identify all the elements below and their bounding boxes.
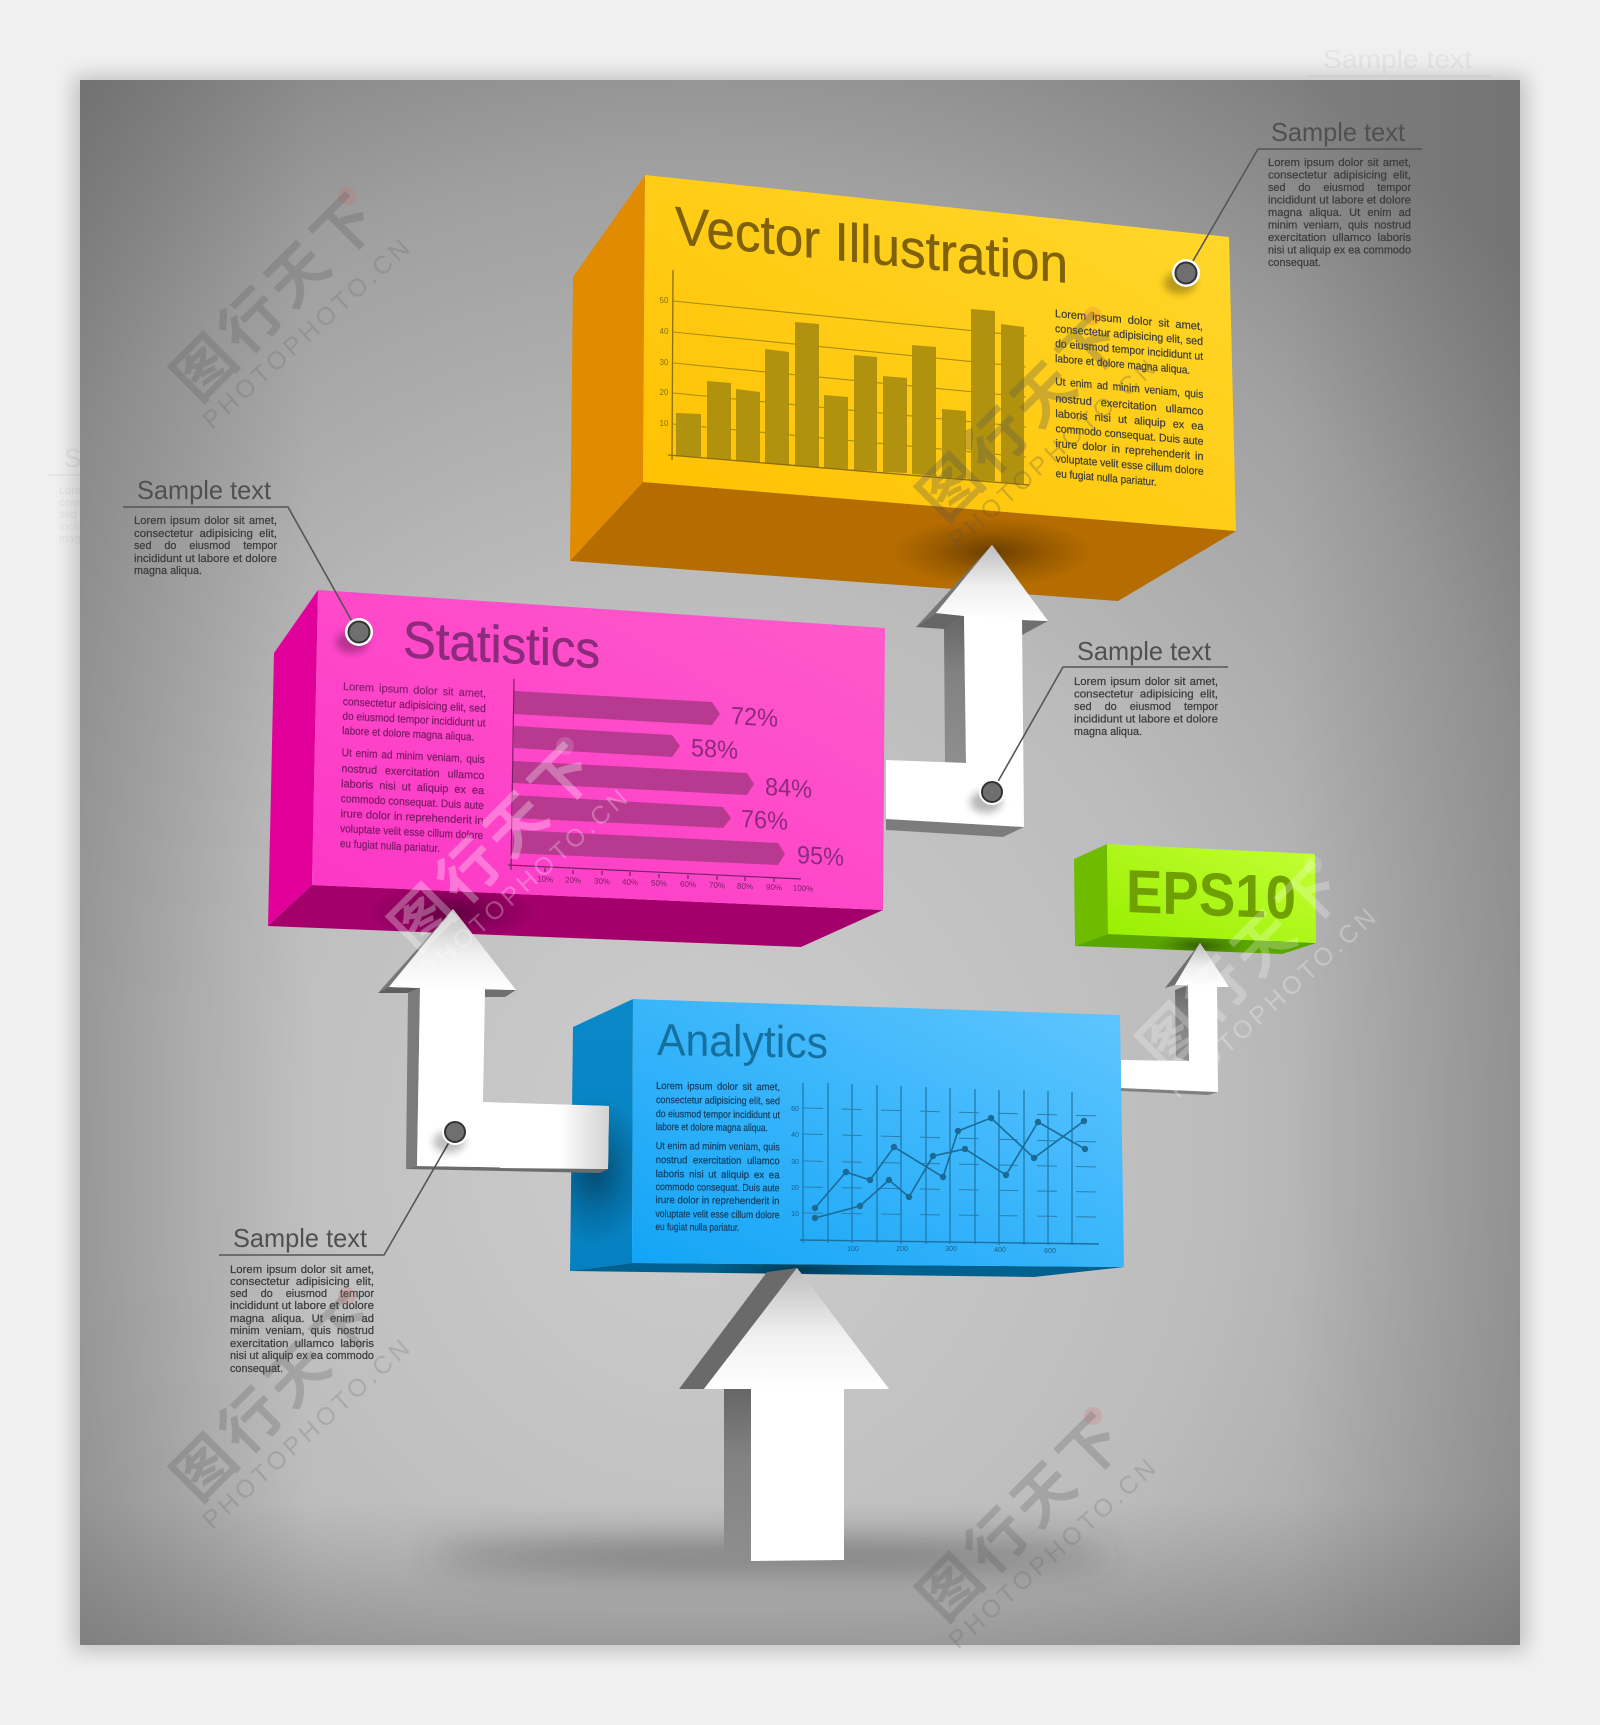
- text block: sed do eiusmod tempor: [1268, 182, 1411, 194]
- faded ghost caption left: incididunt: [59, 521, 105, 533]
- text block: analytics: do eiusmod tempor incididunt ut: [656, 1109, 780, 1121]
- arrow: middle elbow: [886, 545, 1048, 837]
- shadow on analytics box: [570, 1104, 872, 1274]
- text block: exercitation ullamco laboris: [230, 1338, 375, 1350]
- text block: incididunt ut labore et dolore: [230, 1300, 374, 1312]
- text block: Lorem ipsum dolor sit amet,: [230, 1264, 374, 1276]
- bar chart: percentages: 76%: [741, 805, 788, 836]
- text block: [230, 1264, 375, 1375]
- heading: statistics: Statistics: [403, 611, 600, 680]
- text block: exercitation ullamco laboris: [1268, 232, 1412, 244]
- panel: vector illustration box: [570, 175, 1236, 601]
- pointer dot: [1164, 259, 1200, 294]
- panel: EPS10 box: [1074, 844, 1316, 960]
- bar chart: percentages: 72%: [731, 702, 778, 733]
- watermark on pink box: 图行天下: [378, 729, 612, 963]
- watermark bottom centre: PHOTOPHOTO.CN: [943, 1454, 1161, 1654]
- text block: consequat.: [230, 1363, 283, 1375]
- text block: analytics: consectetur adipisicing elit, sed: [656, 1095, 780, 1107]
- bar chart: percentages: 30%: [594, 877, 610, 886]
- line chart: [791, 1083, 1099, 1255]
- line chart: 40: [791, 1132, 799, 1139]
- text block: analytics: nostrud exercitation ullamco: [656, 1155, 780, 1167]
- bar chart: yearly columns: [660, 270, 1029, 485]
- line chart: 400: [994, 1247, 1006, 1254]
- text block: statistics: [340, 681, 487, 857]
- line chart: 20: [791, 1185, 799, 1192]
- text block: Lorem ipsum dolor sit amet,: [134, 515, 277, 527]
- bar chart: percentages: 60%: [680, 880, 696, 889]
- text block: vector illustration: commodo consequat. Duis aute: [1055, 423, 1203, 448]
- text block: statistics: voluptate velit esse cillum dolore: [340, 823, 483, 842]
- text block: magna aliqua. Ut enim ad: [1268, 207, 1411, 219]
- bar chart: percentages: 40%: [622, 878, 638, 887]
- panel: statistics box: [268, 590, 885, 947]
- text block: analytics: commodo consequat. Duis aute: [656, 1182, 780, 1194]
- text block: Lorem ipsum dolor sit amet,: [1268, 157, 1411, 169]
- text block: magna aliqua.: [134, 565, 202, 577]
- text block: statistics: irure dolor in reprehenderit in: [340, 808, 484, 827]
- callout: left: [123, 475, 373, 653]
- bar chart: percentages: 80%: [737, 882, 753, 891]
- heading: analytics: Analytics: [657, 1014, 828, 1068]
- heading: sample text: Sample text: [1271, 117, 1406, 147]
- text block: analytics: eu fugiat nulla pariatur.: [655, 1222, 739, 1234]
- text block: sed do eiusmod tempor: [134, 540, 277, 552]
- arrow: left elbow: [378, 909, 609, 1173]
- bar chart: percentages: 50%: [651, 879, 667, 888]
- line chart: 600: [1044, 1248, 1056, 1255]
- watermark on green box: 图行天下: [1126, 848, 1360, 1082]
- text block: consectetur adipisicing elit,: [230, 1276, 374, 1288]
- text block: statistics: commodo consequat. Duis aute: [341, 793, 484, 812]
- text block: incididunt ut labore et dolore: [1268, 194, 1411, 206]
- text block: analytics: [655, 1081, 780, 1234]
- text block: [1268, 157, 1412, 269]
- line chart: 200: [896, 1246, 908, 1253]
- bar chart: percentages: 84%: [765, 773, 812, 804]
- heading: sample text: Sample text: [233, 1223, 368, 1253]
- text block: statistics: do eiusmod tempor incididunt ut: [342, 711, 486, 730]
- faded ghost caption left: S: [64, 443, 81, 473]
- bar chart: percentages: 58%: [691, 734, 738, 765]
- line chart: 60: [791, 1106, 799, 1113]
- text block: statistics: Lorem ipsum dolor sit amet,: [343, 681, 486, 700]
- text block: incididunt ut labore et dolore: [134, 553, 277, 565]
- watermark bottom centre: 图行天下: [906, 1399, 1140, 1633]
- text block: statistics: eu fugiat nulla pariatur.: [340, 838, 440, 855]
- text block: consectetur adipisicing elit,: [134, 528, 277, 540]
- watermark on yellow box: PHOTOPHOTO.CN: [943, 354, 1161, 554]
- callout: bottom left: [219, 1119, 468, 1375]
- text block: vector illustration: [1055, 308, 1205, 493]
- text block: analytics: Lorem ipsum dolor sit amet,: [656, 1081, 780, 1093]
- bar chart: yearly columns: 20: [660, 388, 669, 397]
- floor shadow: [430, 1544, 1110, 1568]
- bar chart: percentages: 90%: [766, 883, 782, 892]
- line chart: 30: [791, 1159, 799, 1166]
- shadow on statistics box: [380, 890, 524, 934]
- watermark bottom left: PHOTOPHOTO.CN: [197, 1334, 415, 1534]
- text block: analytics: voluptate velit esse cillum dolore: [655, 1209, 780, 1221]
- panel: analytics box: [540, 999, 1124, 1284]
- bar chart: percentages: 20%: [565, 876, 581, 885]
- arrow: bottom large: [679, 1268, 889, 1561]
- text block: statistics: laboris nisi ut aliquip ex ea: [341, 778, 485, 797]
- watermark top left: 图行天下: [160, 179, 394, 413]
- line chart: 10: [791, 1211, 799, 1218]
- text block: magna aliqua. Ut enim ad: [230, 1313, 374, 1325]
- faded ghost caption left: sed do: [59, 509, 92, 521]
- text block: incididunt ut labore et dolore: [1074, 714, 1218, 726]
- text block: analytics: labore et dolore magna aliqua.: [656, 1122, 768, 1134]
- shadow on vector illustration box: [905, 522, 1079, 580]
- text block: vector illustration: consectetur adipisicing elit, sed: [1055, 323, 1203, 348]
- pointer dot: [336, 618, 373, 653]
- bar chart: percentages: [508, 679, 844, 894]
- line chart: 100: [847, 1246, 859, 1253]
- bar chart: yearly columns: 40: [660, 327, 669, 336]
- text block: minim veniam, quis nostrud: [1268, 220, 1411, 232]
- bar chart: percentages: 95%: [797, 841, 844, 872]
- text block: vector illustration: Ut enim ad minim veniam, quis: [1055, 376, 1204, 401]
- shadow on EPS10 box: [1162, 937, 1238, 952]
- text block: magna aliqua.: [1074, 726, 1142, 738]
- heading: sample text: Sample text: [1077, 636, 1212, 666]
- data series 2: [813, 1120, 1087, 1220]
- text block: vector illustration: eu fugiat nulla pariatur.: [1056, 468, 1157, 489]
- text block: statistics: nostrud exercitation ullamco: [341, 763, 485, 782]
- bar chart: percentages: 100%: [793, 883, 813, 894]
- faded ghost caption left: magna: [59, 533, 94, 545]
- text block: vector illustration: irure dolor in reprehenderit in: [1055, 438, 1204, 463]
- text block: sed do eiusmod tempor: [230, 1288, 374, 1300]
- text block: consectetur adipisicing elit,: [1074, 688, 1218, 700]
- line chart: 300: [945, 1246, 957, 1253]
- text block: vector illustration: do eiusmod tempor incididunt ut: [1055, 338, 1203, 363]
- text block: consectetur adipisicing elit,: [1268, 170, 1411, 182]
- text block: sed do eiusmod tempor: [1074, 701, 1218, 713]
- bar chart: percentages: 70%: [709, 881, 725, 890]
- bar chart: yearly columns: 30: [660, 358, 669, 367]
- arrow: right elbow: [1121, 943, 1229, 1095]
- text block: vector illustration: voluptate velit esse cillum dolore: [1056, 453, 1204, 478]
- text block: [134, 515, 277, 577]
- text block: vector illustration: Lorem ipsum dolor sit amet,: [1055, 308, 1203, 333]
- text block: Lorem ipsum dolor sit amet,: [1074, 676, 1218, 688]
- text block: vector illustration: labore et dolore magna aliqua.: [1055, 353, 1190, 377]
- callout: right: [970, 636, 1228, 813]
- text block: vector illustration: nostrud exercitation ullamco: [1055, 393, 1203, 418]
- bar chart: yearly columns: 50: [660, 296, 669, 305]
- text block: consequat.: [1268, 257, 1321, 269]
- faded ghost caption left: consectetur: [59, 497, 116, 509]
- text block: statistics: consectetur adipisicing elit, sed: [343, 696, 486, 715]
- text block: [1074, 676, 1218, 738]
- text block: statistics: labore et dolore magna aliqua.: [342, 725, 474, 744]
- text block: statistics: Ut enim ad minim veniam, quis: [342, 747, 485, 766]
- watermark on green box: PHOTOPHOTO.CN: [1163, 903, 1381, 1103]
- text block: analytics: Ut enim ad minim veniam, quis: [656, 1141, 780, 1153]
- heading: vector illustration: Vector Illustration: [675, 196, 1068, 295]
- watermark on yellow box: 图行天下: [906, 299, 1140, 533]
- faded ghost caption top right: Sample text: [1323, 44, 1473, 74]
- bar chart: yearly columns: 10: [660, 419, 669, 428]
- watermark top left: PHOTOPHOTO.CN: [197, 234, 415, 434]
- text block: vector illustration: laboris nisi ut aliquip ex ea: [1055, 408, 1204, 433]
- faded ghost caption left: Lorem: [59, 485, 90, 497]
- callout: top right: [1164, 117, 1422, 294]
- pointer dot: [433, 1119, 468, 1153]
- data series 1: [813, 1116, 1086, 1210]
- text block: minim veniam, quis nostrud: [230, 1325, 374, 1337]
- text block: analytics: irure dolor in reprehenderit in: [656, 1195, 780, 1207]
- watermark on pink box: PHOTOPHOTO.CN: [415, 784, 633, 984]
- bar chart: percentages: 10%: [537, 875, 553, 884]
- text block: nisi ut aliquip ex ea commodo: [1268, 244, 1411, 256]
- text block: analytics: laboris nisi ut aliquip ex ea: [656, 1169, 780, 1181]
- watermark bottom left: 图行天下: [160, 1279, 394, 1513]
- faded ghost caption left: [48, 443, 116, 545]
- text block: nisi ut aliquip ex ea commodo: [230, 1350, 374, 1362]
- pointer dot: [970, 779, 1005, 813]
- heading: sample text: Sample text: [137, 475, 272, 505]
- heading: EPS10: EPS10: [1126, 857, 1296, 932]
